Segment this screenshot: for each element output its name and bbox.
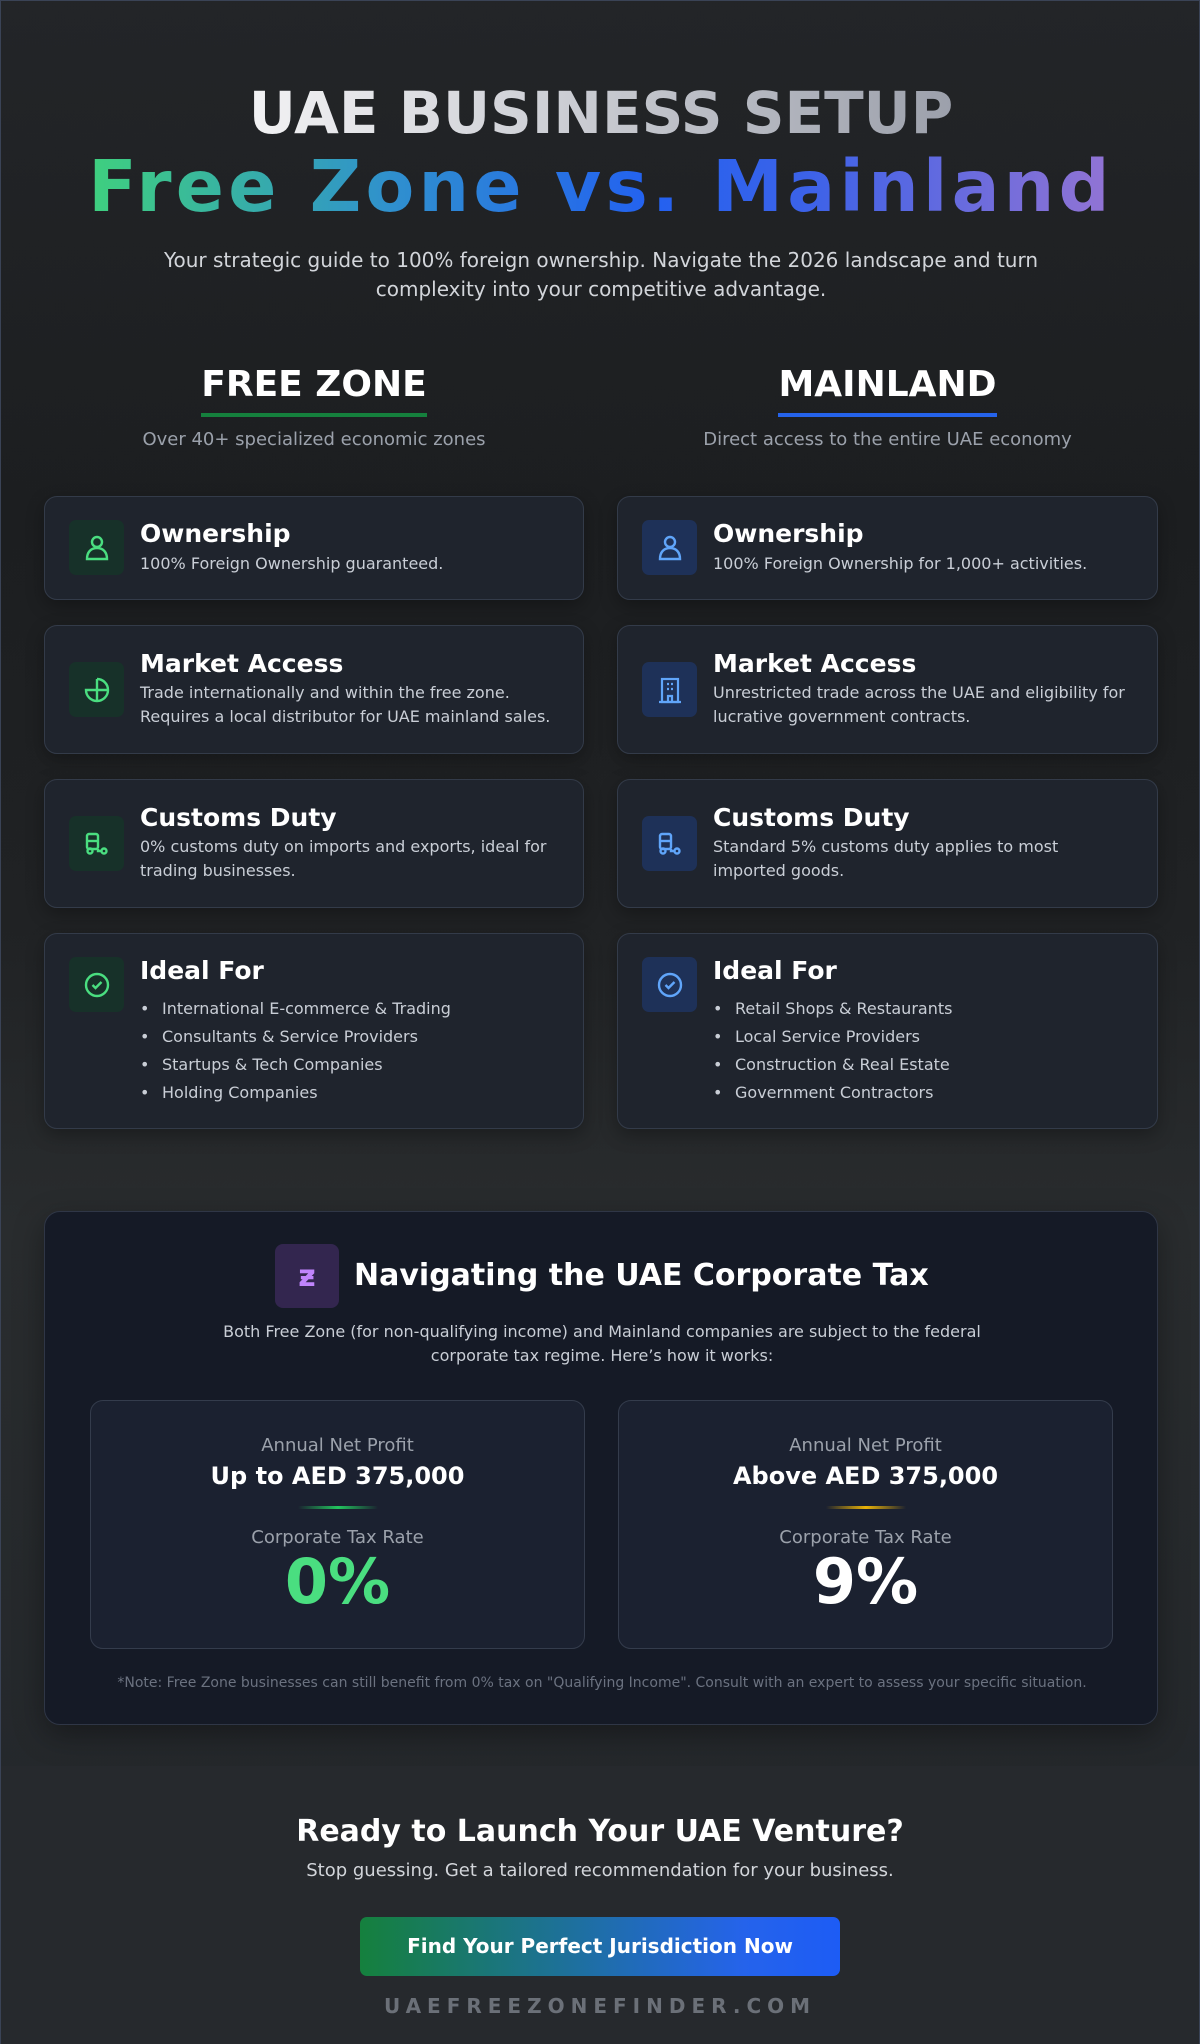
subcard: above 375k: Corporate Tax Rate [779,1527,952,1548]
list: International E-commerce & Trading [162,999,451,1018]
icon: truck [69,816,124,871]
list: Local Service Providers [735,1027,920,1046]
card: mainland customs: Customs Duty [713,803,910,832]
card: free zone ownership: Ownership [140,519,291,548]
subcard: up to 375k: Up to AED 375,000 [211,1462,464,1490]
list: Holding Companies [162,1083,318,1102]
card: free zone market access [44,625,584,754]
icon: globe [69,662,124,717]
button: Find Your Perfect Jurisdiction Now [407,1934,793,1958]
card: free zone ownership [44,496,584,600]
card: mainland customs: imported goods. [713,860,844,880]
list: • [140,1083,149,1102]
cta section [1,1766,1199,2044]
card: free zone ownership: 100% Foreign Ownership guaranteed. [140,554,443,573]
card: mainland ownership: 100% Foreign Ownership for 1,000+ activities. [713,554,1087,573]
subcard: up to 375k [90,1400,585,1649]
title line 2: Free Zone vs. Mainland [88,145,1114,228]
list [713,999,952,1102]
heading: free zone: Over 40+ specialized economic zones [142,429,486,450]
card: mainland market access: lucrative government contracts. [713,706,970,726]
intro text: Your strategic guide to 100% foreign ownership. Navigate the 2026 landscape and turn complexity into your competitive advantage. [164,248,1038,301]
heading: free zone: FREE ZONE [201,364,427,405]
subcard: above 375k [618,1400,1113,1649]
tax heading: Navigating the UAE Corporate Tax [354,1258,929,1293]
card: free zone customs [44,779,584,908]
icon: tax [275,1244,339,1308]
footer url: UAEFREEZONEFINDER.COM [384,1994,816,2018]
subcard: above 375k: Above AED 375,000 [733,1462,998,1490]
subcard: above 375k: 9% [813,1545,918,1618]
button [360,1917,840,1976]
icon: check [642,957,697,1012]
card: mainland customs: Standard 5% customs duty applies to most [713,837,1058,856]
list [140,999,451,1102]
card: free zone customs: 0% customs duty on imports and exports, ideal for [140,837,547,856]
card: mainland market access: Market Access [713,649,916,678]
icon: check [69,957,124,1012]
panel: corporate tax [44,1211,1158,1725]
list: • [713,1055,722,1074]
note: *Note: Free Zone businesses can still benefit from 0% tax on "Qualifying Income". Consult with an expert to assess your specific situation. [117,1675,1087,1691]
card: free zone customs: trading businesses. [140,860,296,880]
card: mainland ownership [617,496,1158,600]
list: Consultants & Service Providers [162,1027,418,1046]
heading: free zone [142,364,486,450]
list: • [713,999,722,1018]
list: Construction & Real Estate [735,1055,950,1074]
icon: person [642,520,697,575]
card: mainland ownership: Ownership [713,519,864,548]
list: • [140,999,149,1018]
card: mainland market access: Unrestricted trade across the UAE and eligibility for [713,683,1125,702]
icon: truck [642,816,697,871]
list: • [140,1027,149,1046]
tax description: Both Free Zone (for non-qualifying income) and Mainland companies are subject to the federal corporate tax regime. Here’s how it works: [223,1322,981,1365]
subcard: up to 375k: Annual Net Profit [261,1435,414,1456]
heading: mainland: Direct access to the entire UAE economy [703,429,1072,450]
list: Retail Shops & Restaurants [735,999,952,1018]
subcard: up to 375k: 0% [285,1545,390,1618]
icon: building [642,662,697,717]
list: • [713,1027,722,1046]
list: • [713,1083,722,1102]
card: mainland ideal for: Ideal For [713,956,837,985]
card: free zone ideal for: Ideal For [140,956,264,985]
card: free zone market access: Market Access [140,649,343,678]
card: mainland ideal for [617,933,1158,1129]
list: • [140,1055,149,1074]
cta sub: Stop guessing. Get a tailored recommendation for your business. [306,1860,894,1881]
title: UAE BUSINESS SETUP [249,79,953,147]
heading: mainland [703,364,1072,450]
card: mainland market access [617,625,1158,754]
list: Government Contractors [735,1083,933,1102]
icon: tax: ƶ [298,1258,316,1294]
card: free zone ideal for [44,933,584,1129]
card: free zone market access: Trade internationally and within the free zone. [140,683,510,702]
list: Startups & Tech Companies [162,1055,383,1074]
icon: person [69,520,124,575]
subcard: above 375k: Annual Net Profit [789,1435,942,1456]
subcard: up to 375k: Corporate Tax Rate [251,1527,424,1548]
card: free zone customs: Customs Duty [140,803,337,832]
cta heading: Ready to Launch Your UAE Venture? [296,1814,904,1849]
card: free zone market access: Requires a local distributor for UAE mainland sales. [140,706,550,726]
card: mainland customs [617,779,1158,908]
heading: mainland: MAINLAND [778,364,997,405]
